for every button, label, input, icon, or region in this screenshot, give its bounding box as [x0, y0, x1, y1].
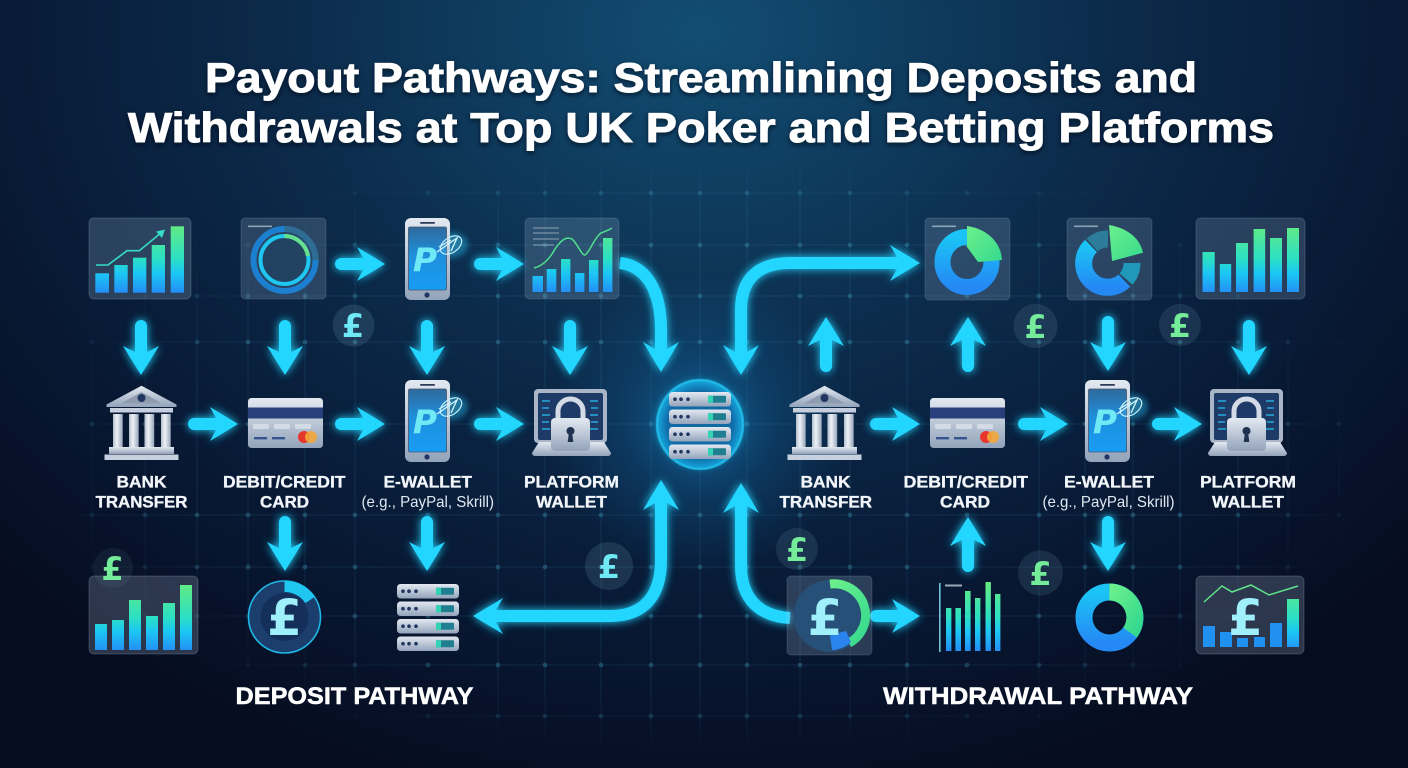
- label: e-wallet withdrawal: E-WALLET: [1064, 472, 1155, 492]
- icon: laptop lock deposit: [532, 389, 611, 456]
- label: e-wallet deposit: (e.g., PayPal, Skrill): [362, 494, 494, 511]
- panel: withdrawal bars with pound: £: [1228, 589, 1263, 647]
- title: Payout Pathways: Streamlining Deposits and: [205, 54, 1197, 101]
- arrow: e-wallet down to server: [409, 516, 445, 571]
- badge: pound withdrawal bottom 2: [1018, 550, 1063, 596]
- title: [128, 54, 1274, 151]
- chart: withdrawal donut: [1084, 592, 1135, 643]
- label: bank transfer withdrawal: TRANSFER: [780, 492, 872, 512]
- icon: laptop lock withdrawal: [1208, 389, 1287, 456]
- title: Withdrawals at Top UK Poker and Betting Platforms: [128, 104, 1274, 151]
- arrow: withdrawal bank up: [808, 317, 844, 372]
- label: platform wallet deposit: PLATFORM: [524, 472, 619, 492]
- label: debit credit card deposit: CARD: [260, 492, 309, 512]
- arrow: curved hub to bottom server: [473, 480, 679, 634]
- icon: phone withdrawal: [1085, 380, 1148, 462]
- icon: server deposit: [397, 584, 459, 651]
- arrow: withdrawal down to platform: [1231, 320, 1267, 375]
- label: e-wallet deposit: [362, 472, 494, 511]
- icon: card withdrawal: [930, 398, 1005, 448]
- panel: deposit bar chart: [89, 218, 191, 299]
- badge: pound deposit bottom right: [585, 542, 633, 590]
- label: bank transfer deposit: TRANSFER: [96, 492, 188, 512]
- label: platform wallet withdrawal: [1200, 472, 1296, 512]
- label: debit credit card deposit: [223, 472, 346, 512]
- panel: withdrawal donut 1: [925, 218, 1010, 300]
- icon: phone top deposit: [405, 218, 468, 300]
- arrows group: [123, 245, 1267, 634]
- icon: phone deposit: [405, 380, 468, 462]
- badge: pound withdrawal bottom 1: £: [786, 531, 808, 569]
- label: platform wallet deposit: WALLET: [536, 492, 608, 512]
- badge: pound withdrawal top 1: [1014, 304, 1058, 348]
- badge: pound deposit top: [332, 304, 374, 346]
- label: bank transfer deposit: BANK: [116, 472, 167, 492]
- arrow: down to card: [267, 320, 303, 375]
- centre hub glow backdrop: [540, 270, 860, 580]
- arrow: curved hub to withdrawal top row: [723, 245, 920, 375]
- label: bank transfer withdrawal: BANK: [800, 472, 851, 492]
- arrow: withdrawal down to e-wallet: [1090, 316, 1126, 371]
- badge: pound deposit top: £: [342, 307, 364, 345]
- arrow: down to bank: [123, 320, 159, 375]
- arrow: withdrawal card to e-wallet: [1018, 407, 1068, 441]
- panel: withdrawal bars: [1196, 218, 1305, 299]
- label: platform wallet deposit: [524, 472, 619, 512]
- panel: deposit line and bar chart: [525, 218, 619, 299]
- label: e-wallet withdrawal: [1042, 472, 1174, 511]
- badge: pound deposit bottom right: £: [598, 548, 620, 586]
- label: bank transfer deposit: [96, 472, 188, 512]
- label: debit credit card deposit: DEBIT/CREDIT: [223, 472, 346, 492]
- arrow: bank to card deposit: [188, 407, 238, 441]
- arrow: bottom panel to bars: [870, 599, 920, 633]
- chart: withdrawal thin bars: [939, 582, 1000, 652]
- icon: pound coin: £: [267, 589, 302, 647]
- panel: deposit ring chart: [241, 218, 326, 299]
- arrow: withdrawal e-wallet to platform: [1152, 407, 1202, 441]
- arrow: bars up to card: [950, 517, 986, 572]
- label: debit credit card withdrawal: DEBIT/CREDIT: [904, 472, 1029, 492]
- arrow: curved bottom panel to hub: [723, 483, 790, 618]
- arrow: down to platform: [552, 320, 588, 375]
- arrow: withdrawal bank to card: [870, 407, 920, 441]
- label: platform wallet withdrawal: WALLET: [1212, 492, 1285, 512]
- badge: pound withdrawal top 1: £: [1024, 308, 1047, 346]
- badge: pound withdrawal bottom 2: £: [1029, 555, 1052, 593]
- icon: card deposit: [248, 398, 323, 448]
- badge: pound withdrawal top 2: £: [1169, 307, 1191, 345]
- arrow: top row deposit right 2: [474, 247, 524, 281]
- heading: withdrawal pathway: WITHDRAWAL PATHWAY: [883, 683, 1193, 710]
- arrow: down to e-wallet: [409, 320, 445, 375]
- arrow: e-wallet to platform deposit: [474, 407, 524, 441]
- panel: withdrawal pound donut: £: [808, 589, 842, 647]
- arrow: curved platform to hub: [620, 263, 679, 372]
- label: e-wallet deposit: E-WALLET: [384, 472, 473, 492]
- arrow: card to e-wallet deposit: [335, 407, 385, 441]
- arrow: e-wallet down to donut: [1090, 516, 1126, 571]
- badge: pound withdrawal top 2: [1159, 304, 1201, 346]
- panel: withdrawal pound donut: [787, 576, 872, 655]
- panel: withdrawal donut 2: [1067, 218, 1152, 300]
- icon: bank withdrawal: [788, 386, 862, 460]
- panel: deposit bottom bars with pound: [89, 548, 198, 654]
- arrow: withdrawal card up: [950, 317, 986, 372]
- heading: deposit pathway: DEPOSIT PATHWAY: [236, 683, 474, 710]
- arrow: card down to pound: [267, 516, 303, 571]
- label: bank transfer withdrawal: [780, 472, 872, 512]
- label: e-wallet withdrawal: (e.g., PayPal, Skrill): [1042, 494, 1174, 511]
- label: debit credit card withdrawal: CARD: [940, 492, 990, 512]
- label: debit credit card withdrawal: [904, 472, 1029, 512]
- panel: deposit bottom bars with pound: £: [101, 550, 124, 588]
- panel: withdrawal bars with pound: [1196, 576, 1304, 654]
- central hub: server: [654, 378, 746, 470]
- icon: bank deposit: [104, 386, 178, 460]
- arrow: top row deposit right 1: [335, 247, 385, 281]
- label: platform wallet withdrawal: PLATFORM: [1200, 472, 1296, 492]
- badge: pound withdrawal bottom 1: [776, 528, 818, 570]
- icon: pound coin: [248, 581, 320, 653]
